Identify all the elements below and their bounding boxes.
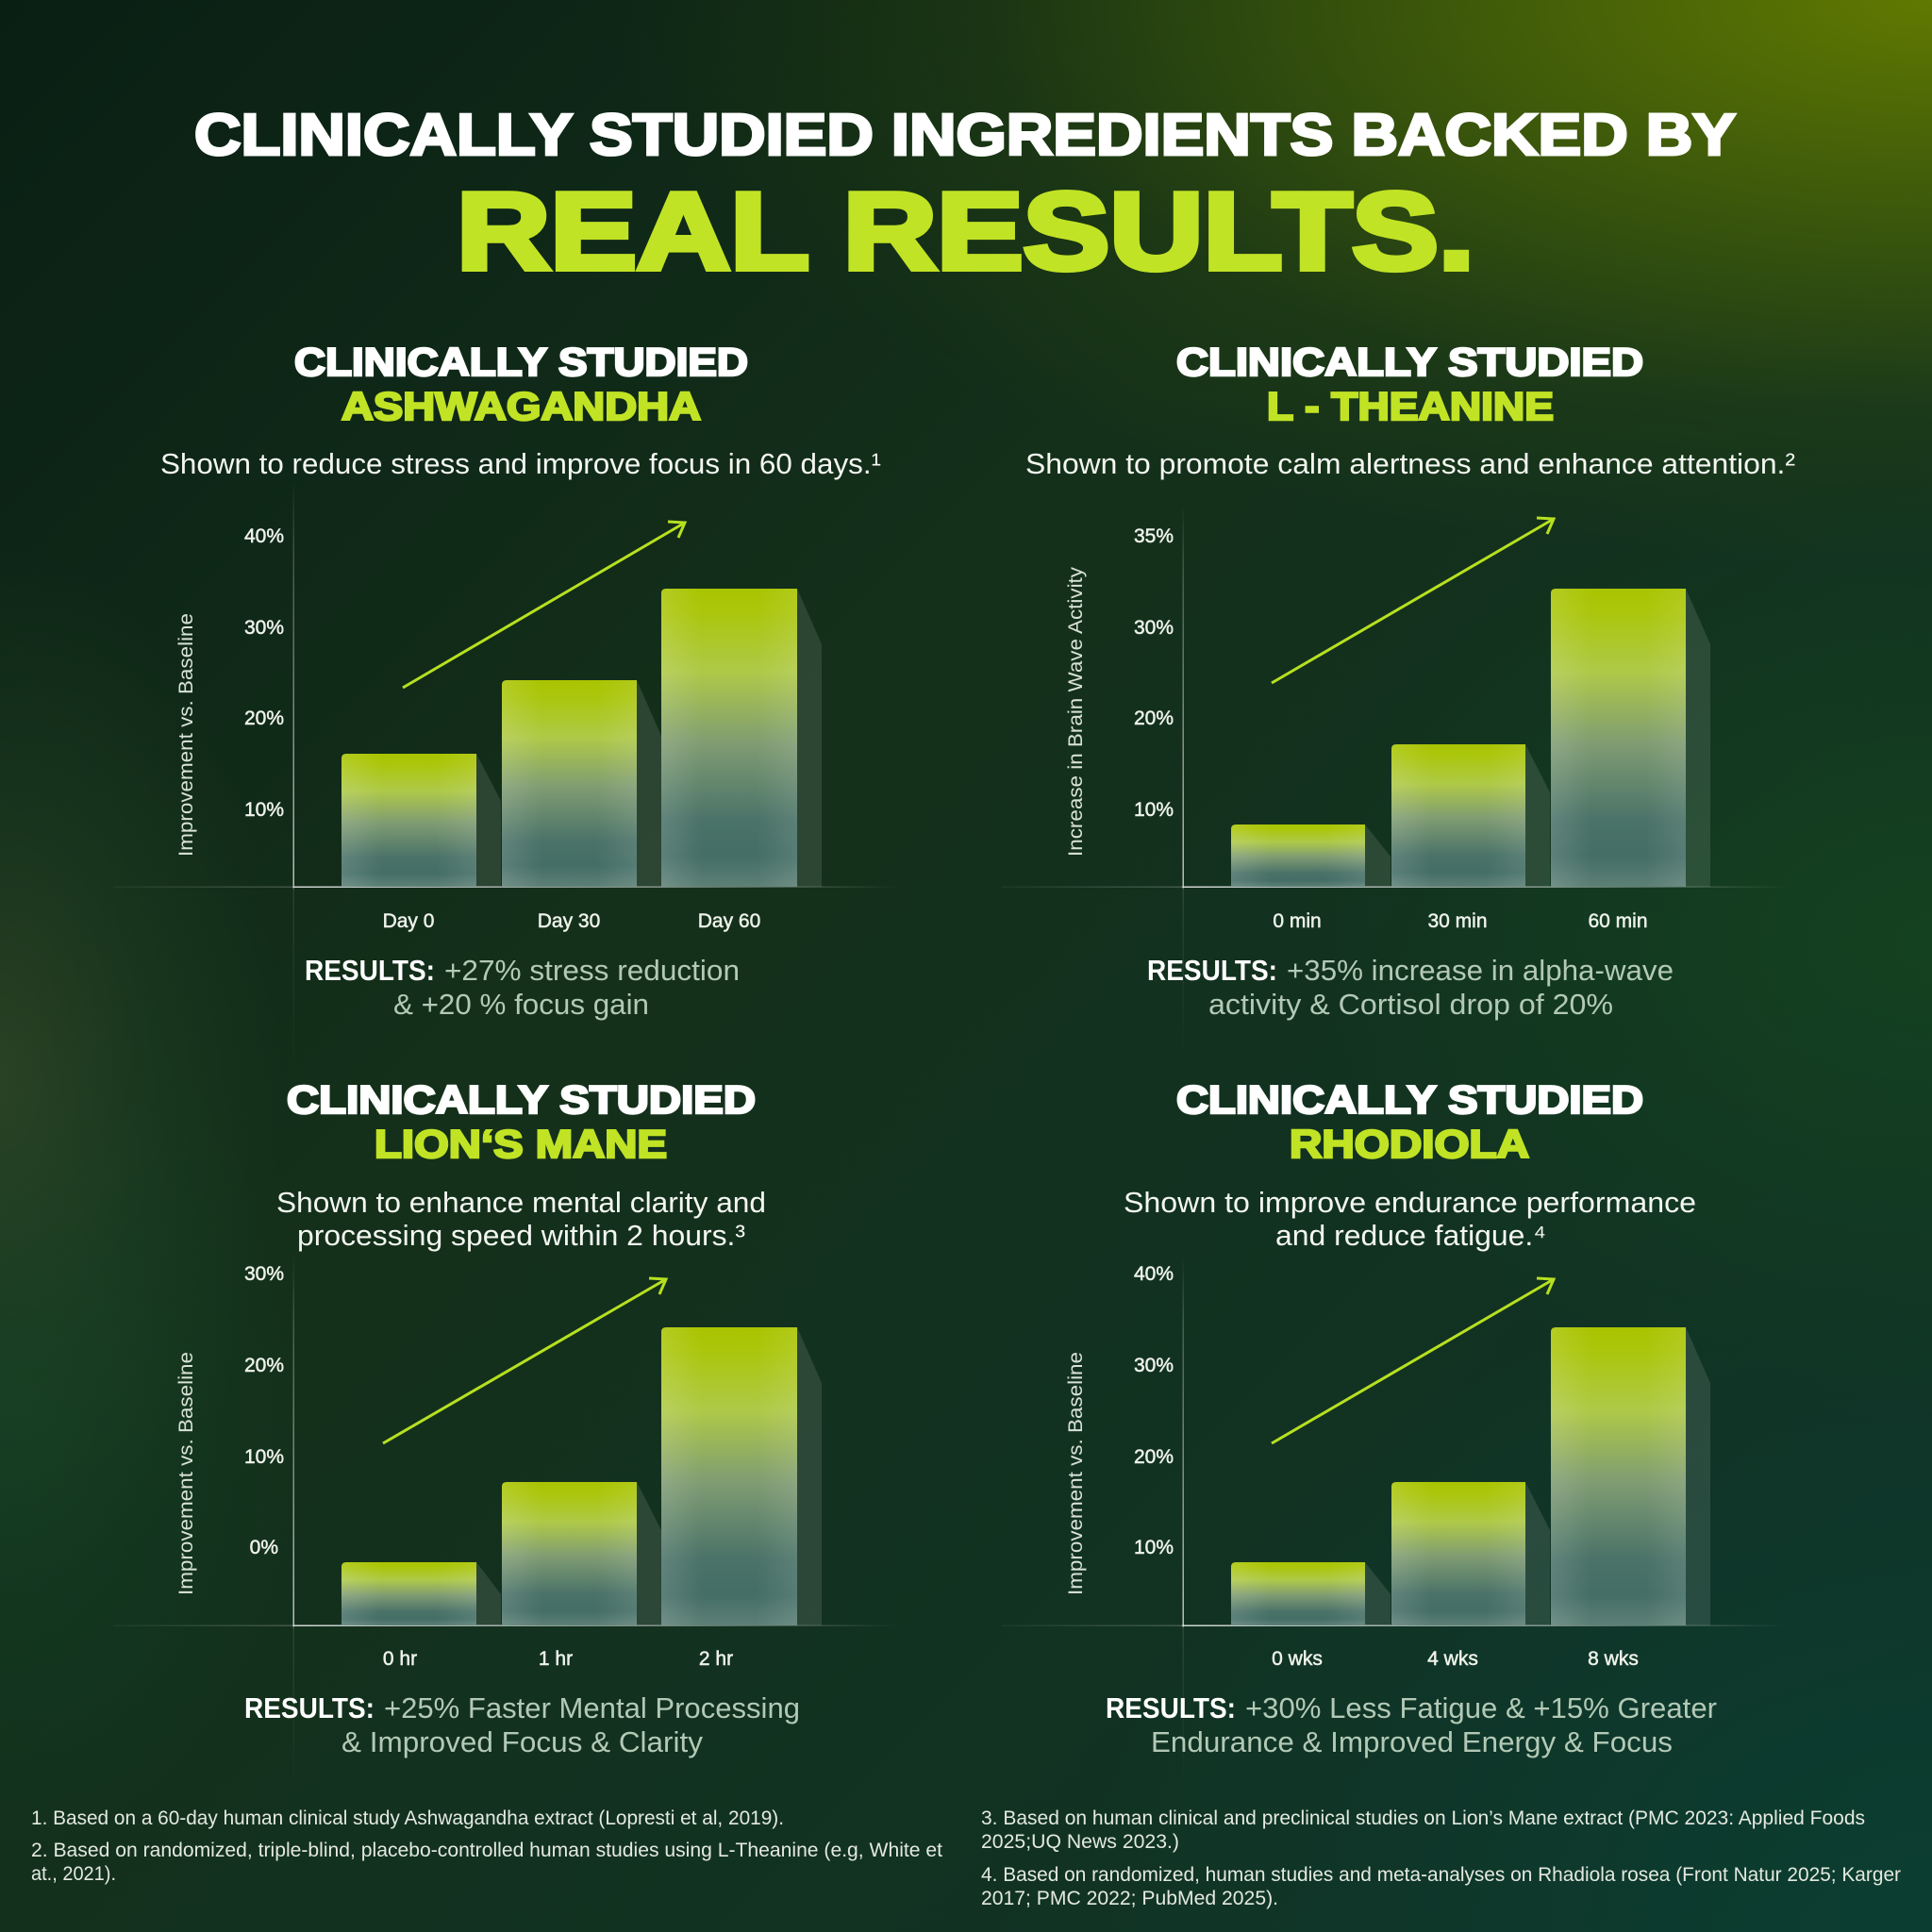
- panel: lion's mane: [113, 1077, 899, 1791]
- bars: [1231, 589, 1710, 887]
- x axis labels: 4 wks: [1427, 1648, 1478, 1670]
- description: processing speed within 2 hours.³: [297, 1219, 745, 1252]
- y axis labels: 30%: [244, 1263, 284, 1285]
- y axis labels: 30%: [1134, 617, 1174, 639]
- panel: rhodiola: [1002, 1077, 1790, 1791]
- results: & Improved Focus & Clarity: [341, 1725, 703, 1758]
- x axis labels: 2 hr: [699, 1648, 733, 1670]
- bars: [341, 589, 822, 887]
- description: [276, 1186, 766, 1252]
- y axis labels: [1134, 1263, 1174, 1558]
- results: activity & Cortisol drop of 20%: [1208, 988, 1613, 1021]
- x axis labels: Day 30: [538, 910, 600, 932]
- heading: RHODIOLA: [1290, 1122, 1529, 1166]
- description: Shown to reduce stress and improve focus in 60 days.¹: [160, 447, 881, 480]
- y axis labels: 10%: [244, 799, 284, 821]
- y axis title: Improvement vs. Baseline: [175, 1352, 197, 1595]
- y axis labels: 20%: [244, 708, 284, 729]
- results: +30% Less Fatigue & +15% Greater: [1245, 1691, 1717, 1724]
- arrow: [403, 522, 685, 688]
- bar chart: [1002, 505, 1790, 1058]
- x axis labels: [383, 910, 760, 932]
- heading: CLINICALLY STUDIED: [294, 340, 748, 384]
- y axis labels: 20%: [1134, 708, 1174, 729]
- footnotes left: [31, 1807, 942, 1885]
- results: RESULTS:: [305, 954, 435, 987]
- arrow: [1272, 1278, 1554, 1443]
- title line 2: REAL RESULTS.: [457, 170, 1474, 292]
- description: Shown to promote calm alertness and enhance attention.²: [1025, 447, 1795, 480]
- x axis labels: 0 hr: [383, 1648, 417, 1670]
- x axis labels: [383, 1648, 733, 1670]
- title line 1: CLINICALLY STUDIED INGREDIENTS BACKED BY: [194, 103, 1736, 168]
- y axis title: Improvement vs. Baseline: [175, 613, 197, 857]
- results: RESULTS:: [244, 1691, 375, 1724]
- y axis labels: 30%: [1134, 1355, 1174, 1376]
- panel: ashwagandha: [113, 340, 899, 1069]
- description: Shown to enhance mental clarity and: [276, 1186, 766, 1219]
- x axis labels: [1272, 1648, 1639, 1670]
- results: +27% stress reduction: [444, 954, 740, 987]
- y axis labels: 0%: [250, 1537, 278, 1558]
- x axis labels: 0 min: [1273, 910, 1322, 932]
- results: +25% Faster Mental Processing: [384, 1691, 800, 1724]
- y axis labels: 40%: [244, 525, 284, 547]
- heading: [1176, 340, 1643, 428]
- y axis labels: 20%: [244, 1355, 284, 1376]
- heading: CLINICALLY STUDIED: [1176, 340, 1643, 384]
- results: RESULTS:: [1106, 1691, 1236, 1724]
- y axis labels: [244, 525, 284, 821]
- y axis labels: [1134, 525, 1174, 821]
- x axis labels: Day 0: [383, 910, 434, 932]
- x axis labels: 60 min: [1588, 910, 1648, 932]
- y axis title: Increase in Brain Wave Activity: [1065, 566, 1087, 857]
- heading: L - THEANINE: [1267, 384, 1554, 428]
- bar chart: [113, 1257, 899, 1791]
- results: [1106, 1691, 1717, 1758]
- arrow: [383, 1278, 666, 1443]
- heading: [1176, 1077, 1643, 1166]
- y axis labels: 10%: [1134, 1537, 1174, 1558]
- bars: [341, 1327, 822, 1625]
- y axis labels: [244, 1263, 284, 1558]
- heading: CLINICALLY STUDIED: [287, 1077, 756, 1122]
- arrow: [1272, 518, 1554, 683]
- panel: l-theanine: [1002, 340, 1795, 1058]
- results: Endurance & Improved Energy & Focus: [1151, 1725, 1673, 1758]
- results: & +20 % focus gain: [393, 988, 649, 1021]
- y axis labels: 40%: [1134, 1263, 1174, 1285]
- heading: [287, 1077, 756, 1166]
- bar chart: [1002, 1257, 1790, 1791]
- results: [1147, 954, 1674, 1021]
- description: Shown to improve endurance performance: [1124, 1186, 1696, 1219]
- footnotes right: 2025;UQ News 2023.): [981, 1831, 1179, 1853]
- y axis title: Improvement vs. Baseline: [1065, 1352, 1087, 1595]
- bar chart: [113, 481, 899, 1069]
- description: and reduce fatigue.⁴: [1275, 1219, 1546, 1252]
- heading: CLINICALLY STUDIED: [1176, 1077, 1643, 1122]
- results: +35% increase in alpha-wave: [1287, 954, 1674, 987]
- y axis labels: 10%: [1134, 799, 1174, 821]
- footnotes left: at., 2021).: [31, 1863, 116, 1885]
- footnotes left: 2. Based on randomized, triple-blind, placebo-controlled human studies using L-Theanine (e.g, White et: [31, 1840, 942, 1861]
- y axis labels: 20%: [1134, 1446, 1174, 1468]
- title: [194, 103, 1736, 292]
- x axis labels: 8 wks: [1588, 1648, 1639, 1670]
- heading: [294, 340, 748, 428]
- results: [244, 1691, 800, 1758]
- heading: LION‘S MANE: [375, 1122, 667, 1166]
- footnotes right: [981, 1807, 1901, 1909]
- x axis labels: 30 min: [1427, 910, 1488, 932]
- x axis labels: 1 hr: [539, 1648, 573, 1670]
- footnotes right: 4. Based on randomized, human studies and meta-analyses on Rhadiola rosea (Front Natur 2025; Karger: [981, 1864, 1901, 1886]
- heading: ASHWAGANDHA: [341, 384, 701, 428]
- y axis labels: 30%: [244, 617, 284, 639]
- y axis labels: 35%: [1134, 525, 1174, 547]
- x axis labels: Day 60: [698, 910, 760, 932]
- footnotes right: 3. Based on human clinical and preclinical studies on Lion’s Mane extract (PMC 2023: Applied Foods: [981, 1807, 1865, 1829]
- bars: [1231, 1327, 1710, 1625]
- footnotes left: 1. Based on a 60-day human clinical study Ashwagandha extract (Lopresti et al, 2019).: [31, 1807, 784, 1829]
- y axis labels: 10%: [244, 1446, 284, 1468]
- x axis labels: [1273, 910, 1648, 932]
- results: RESULTS:: [1147, 954, 1277, 987]
- footnotes right: 2017; PMC 2022; PubMed 2025).: [981, 1888, 1278, 1909]
- x axis labels: 0 wks: [1272, 1648, 1323, 1670]
- results: [305, 954, 740, 1021]
- description: [1124, 1186, 1696, 1252]
